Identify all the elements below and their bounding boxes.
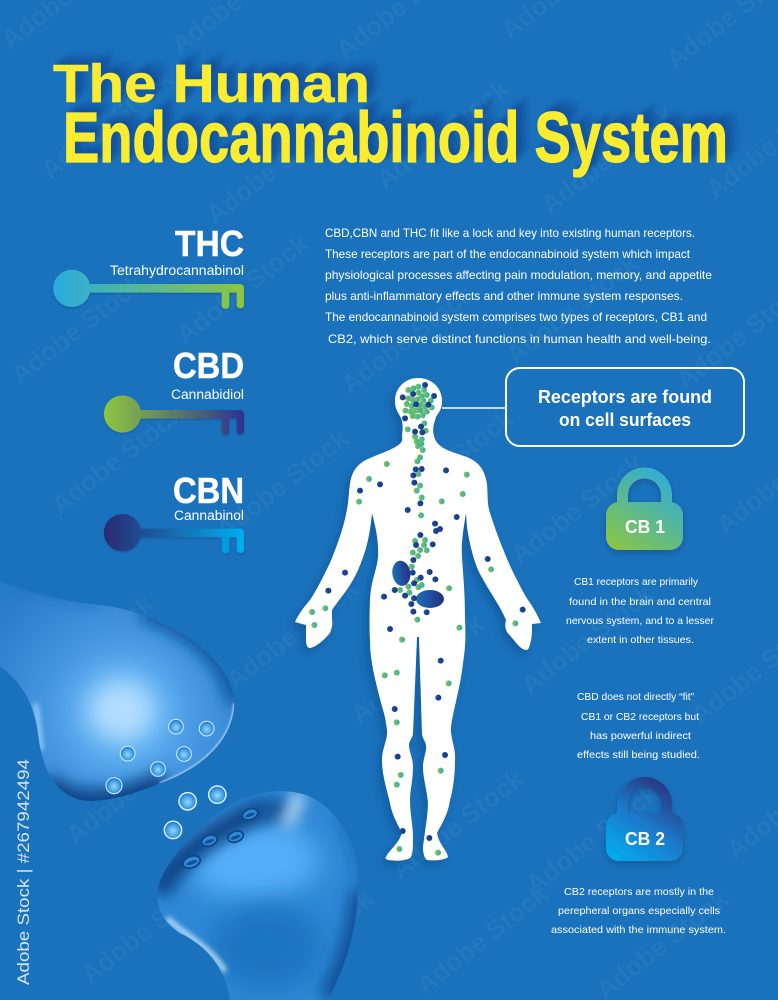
receptor sites — [181, 807, 259, 870]
organs — [391, 560, 444, 608]
text: Adobe Stock — [45, 398, 189, 520]
text: Adobe Stock — [535, 98, 679, 220]
CB2 description: associated with the immune system. — [551, 924, 726, 936]
intro text: plus anti-inflammatory effects and other immune system responses. — [325, 289, 683, 303]
text: Adobe Stock — [170, 228, 314, 350]
key: CBN: CBN — [173, 470, 244, 511]
icon: CB2 lock — [606, 777, 683, 861]
key: CBD: CBD — [173, 345, 244, 386]
key: CBN — [104, 470, 244, 553]
CB2 description — [551, 886, 726, 936]
key: THC: Tetrahydrocannabinol — [110, 263, 244, 278]
receptor dots: dark blue — [325, 382, 526, 841]
intro text — [325, 226, 712, 346]
key: CBD: Cannabidiol — [171, 387, 244, 402]
text: Adobe Stock — [5, 268, 149, 390]
postsynaptic neuron — [153, 783, 367, 1000]
callout: receptors: on cell surfaces — [559, 410, 691, 430]
text: Adobe Stock — [385, 763, 529, 885]
CBD description: CB1 or CB2 receptors but — [581, 711, 699, 723]
key: THC — [53, 223, 244, 309]
receptor dots: green — [309, 384, 518, 856]
text: Adobe Stock — [335, 278, 479, 400]
title: The Human — [53, 54, 370, 114]
text: Adobe Stock — [505, 448, 649, 570]
text: Adobe Stock — [370, 73, 514, 195]
neurotransmitter vesicles — [164, 786, 226, 839]
CB1 description: CB1 receptors are primarily — [574, 576, 699, 588]
callout: receptors — [506, 368, 744, 446]
text: Adobe Stock — [500, 248, 644, 370]
key: THC: THC — [175, 223, 244, 264]
text: Adobe Stock — [375, 403, 519, 525]
connector line — [442, 407, 507, 409]
body silhouette — [295, 378, 541, 861]
text: Adobe Stock — [520, 778, 664, 900]
callout: receptors: Receptors are found — [538, 387, 712, 407]
presynaptic neuron — [0, 582, 234, 801]
text: Adobe Stock — [60, 728, 204, 850]
CBD description — [577, 691, 700, 761]
CB2 description: perepheral organs especially cells — [558, 905, 720, 917]
title — [53, 54, 728, 178]
icon: CB2 lock: CB 2 — [625, 829, 665, 849]
text: Adobe Stock — [15, 588, 159, 710]
intro text: physiological processes affecting pain modulation, memory, and appetite — [325, 268, 712, 282]
CBD description: has powerful indirect — [590, 730, 691, 742]
text: Adobe Stock — [35, 63, 179, 185]
intro text: CBD,CBN and THC fit like a lock and key into existing human receptors. — [325, 226, 695, 240]
text: Adobe Stock — [210, 423, 354, 545]
text: Adobe Stock — [220, 573, 364, 695]
text: Adobe Stock — [515, 578, 659, 700]
text: Adobe Stock — [345, 608, 489, 730]
CB1 description: extent in other tissues. — [587, 634, 694, 646]
text: Adobe Stock — [410, 878, 554, 1000]
icon: CB1 lock — [606, 468, 683, 550]
human body figure — [295, 378, 541, 861]
intro text: These receptors are part of the endocannabinoid system which impact — [325, 247, 691, 261]
key: CBD — [104, 345, 244, 435]
intro text: CB2, which serve distinct functions in human health and well-being. — [328, 332, 711, 346]
CB1 description: found in the brain and central — [569, 596, 711, 608]
CB1 description — [566, 576, 714, 646]
intro text: The endocannabinoid system comprises two types of receptors, CB1 and — [325, 310, 707, 324]
text: Adobe Stock — [75, 868, 219, 990]
synapse illustration — [0, 570, 367, 1000]
CB1 description: nervous system, and to a lesser — [566, 615, 714, 627]
stock id caption: Adobe Stock | #267942494 — [14, 759, 33, 985]
text: Adobe Stock — [200, 108, 344, 230]
key: CBN: Cannabinol — [174, 508, 244, 523]
CBD description: CBD does not directly “fit” — [577, 691, 694, 703]
icon: CB1 lock: CB 1 — [625, 517, 665, 537]
CBD description: effects still being studied. — [577, 749, 700, 761]
CB2 description: CB2 receptors are mostly in the — [564, 886, 714, 898]
